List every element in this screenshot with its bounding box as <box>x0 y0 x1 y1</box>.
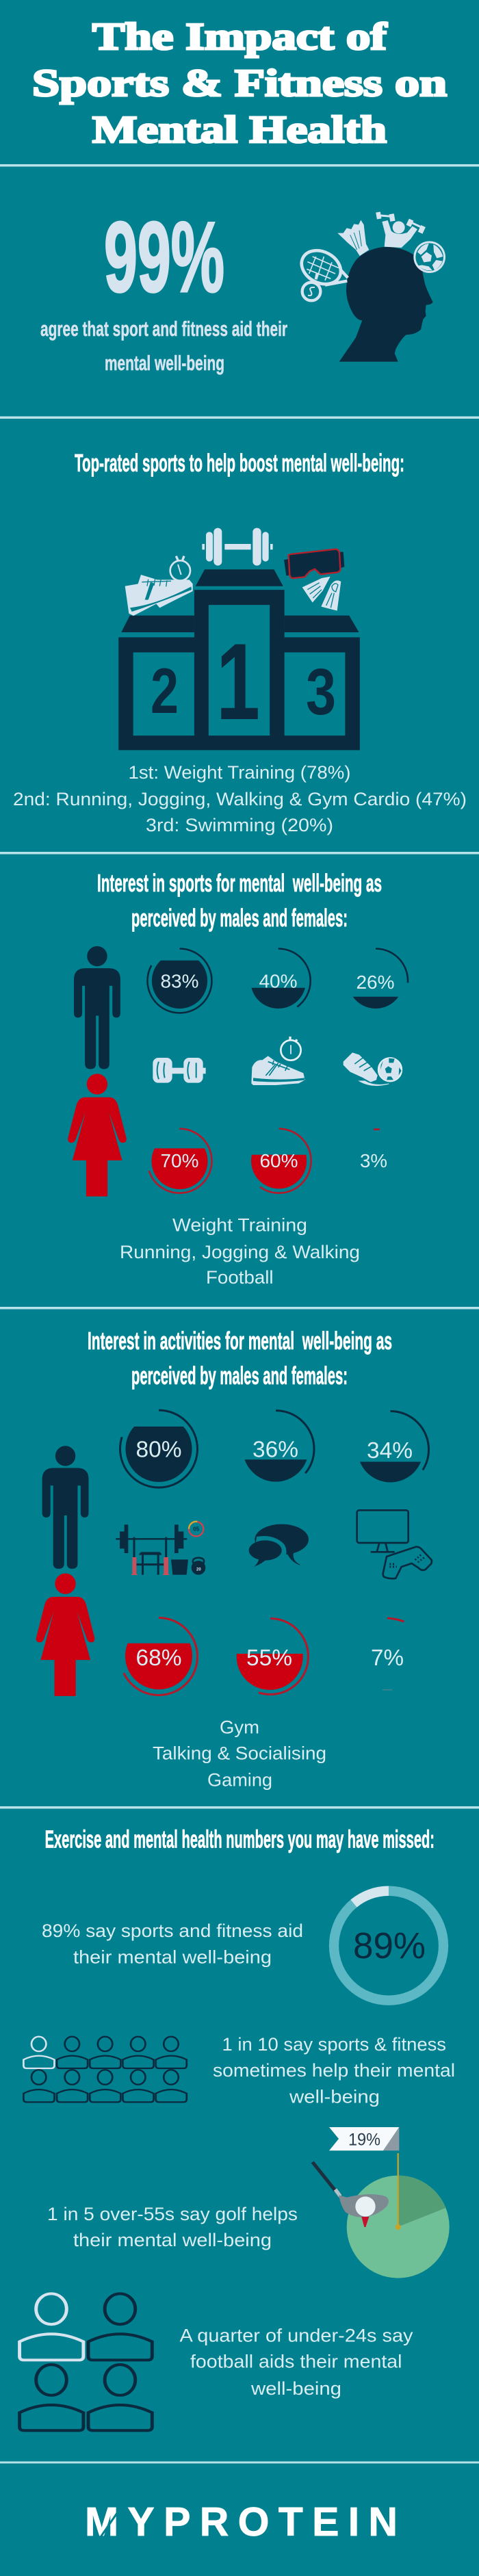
statistic caption <box>40 317 287 375</box>
icon: goggles and fins <box>284 549 344 611</box>
text: 89 percent <box>42 1921 303 1968</box>
text: 89 percent: 89% say sports and fitness aid <box>42 1921 303 1941</box>
podium <box>118 569 360 750</box>
category labels: Talking & Socialising <box>153 1743 326 1764</box>
rankings text <box>13 762 467 835</box>
gauge: female gym 68% <box>120 1617 197 1695</box>
gauge: male gym 80%: 80% <box>135 1437 182 1462</box>
icon: running shoe and stopwatch <box>125 556 193 616</box>
panel: top-rated sports <box>13 449 467 835</box>
gauge: female gym 68%: 68% <box>135 1645 182 1670</box>
icon: speech bubbles <box>249 1524 309 1567</box>
gauge: male gaming 34%: 34% <box>367 1437 413 1463</box>
gauge: female talking 55% <box>233 1619 308 1694</box>
icon: head with sports equipment <box>296 211 445 362</box>
gauge: female weight training 70%: 70% <box>160 1150 198 1171</box>
text: 1 in 5: their mental well-being <box>73 2230 272 2250</box>
podium numbers: 1 <box>216 621 260 742</box>
podium numbers: 3 <box>306 655 336 729</box>
panel: interest in activities by gender <box>36 1327 432 1791</box>
icon: gym equipment: 05 <box>193 1526 200 1533</box>
big statistic: 99% <box>104 201 224 313</box>
title: The Impact of <box>92 16 388 58</box>
text: 1 in 10: 1 in 10 say sports & fitness <box>222 2034 446 2055</box>
gauge: male running 40% <box>246 948 311 1013</box>
text: a quarter <box>179 2325 413 2399</box>
gauge: male gaming 34% <box>352 1411 428 1487</box>
gauge: female football 3%: 3% <box>360 1150 387 1171</box>
gauge: female talking 55%: 55% <box>246 1645 292 1670</box>
text: a quarter: well-being <box>250 2378 341 2399</box>
gauge: male talking 36%: 36% <box>253 1437 298 1462</box>
icon: golf club and ball <box>313 2162 389 2227</box>
rankings text: 1st: Weight Training (78%) <box>129 762 350 783</box>
panel: exercise and mental health numbers <box>20 1825 466 2430</box>
gauge: female weight training 70% <box>148 1129 212 1193</box>
rankings text: 3rd: Swimming (20%) <box>146 815 333 835</box>
gauge: male football 26%: 26% <box>356 972 394 993</box>
logo: Myprotein: MYPROTEIN <box>85 2499 398 2545</box>
panel: 99 percent agree <box>40 201 445 375</box>
gauge: female running 60%: 60% <box>260 1150 298 1171</box>
panel: interest in sports by gender <box>68 869 408 1288</box>
category labels: Running, Jogging & Walking <box>120 1242 360 1262</box>
category labels <box>153 1717 326 1791</box>
gauge: male football 26% <box>344 948 408 1013</box>
donut chart: 89% <box>311 1869 466 2022</box>
text: a quarter: A quarter of under-24s say <box>179 2325 413 2345</box>
icon: gym equipment <box>116 1522 205 1575</box>
icon: four people, one highlighted <box>20 2293 152 2430</box>
podium numbers <box>151 621 336 742</box>
text: 1 in 10: well-being <box>289 2087 380 2107</box>
statistic caption: mental well-being <box>105 351 224 375</box>
category labels: Gaming <box>207 1770 272 1791</box>
gauge: male running 40%: 40% <box>259 970 297 992</box>
text: 1 in 5 <box>47 2204 298 2250</box>
icon: male figure <box>42 1446 88 1569</box>
icon: gym equipment: 20 <box>196 1567 201 1572</box>
text: a quarter: football aids their mental <box>190 2352 402 2372</box>
title: Sports & Fitness on <box>32 62 447 105</box>
icon: dumbbell <box>202 528 273 566</box>
text: 1 in 10: sometimes help their mental <box>213 2060 455 2081</box>
rankings text: 2nd: Running, Jogging, Walking & Gym Cardio (47%) <box>13 789 467 809</box>
gauge: female gaming 7%: 7% <box>371 1645 404 1670</box>
icon: dumbbell <box>153 1058 206 1083</box>
gauge: male talking 36% <box>237 1411 314 1487</box>
statistic caption: agree that sport and fitness aid their <box>40 317 287 341</box>
icon: flag with 19%: 19% <box>348 2131 380 2150</box>
icon: female figure <box>36 1574 94 1696</box>
icon: shoe and stopwatch <box>251 1037 305 1085</box>
gauge: female gaming 7% <box>371 1618 404 1690</box>
donut chart: 89%: 89% <box>353 1925 426 1966</box>
title: Mental Health <box>92 109 387 151</box>
pie chart: golf 19% <box>347 2153 450 2278</box>
icon: female figure <box>68 1074 127 1197</box>
icon: football boot and ball <box>344 1052 402 1086</box>
gauge: female running 60% <box>247 1129 311 1193</box>
heading <box>97 869 382 932</box>
text: 1 in 5: 1 in 5 over-55s say golf helps <box>47 2204 298 2224</box>
icon: ten people, one highlighted <box>23 2037 187 2102</box>
icon: male figure <box>74 946 120 1069</box>
category labels: Football <box>206 1267 274 1288</box>
gauge: male gym 80% <box>120 1410 197 1487</box>
gauge: female football 3% <box>360 1130 387 1171</box>
category labels: Weight Training <box>172 1215 307 1236</box>
icon: monitor and game controller <box>357 1510 432 1578</box>
gauge: male weight training 83% <box>148 948 212 1013</box>
category labels: Gym <box>220 1717 259 1738</box>
heading <box>88 1327 392 1390</box>
category labels <box>120 1215 360 1288</box>
podium numbers: 2 <box>151 655 179 727</box>
gauge: male weight training 83%: 83% <box>160 970 198 992</box>
title <box>32 16 447 151</box>
text: 89 percent: their mental well-being <box>73 1947 272 1968</box>
text: 1 in 10 <box>213 2034 455 2107</box>
icon: flag with 19% <box>329 2127 399 2150</box>
